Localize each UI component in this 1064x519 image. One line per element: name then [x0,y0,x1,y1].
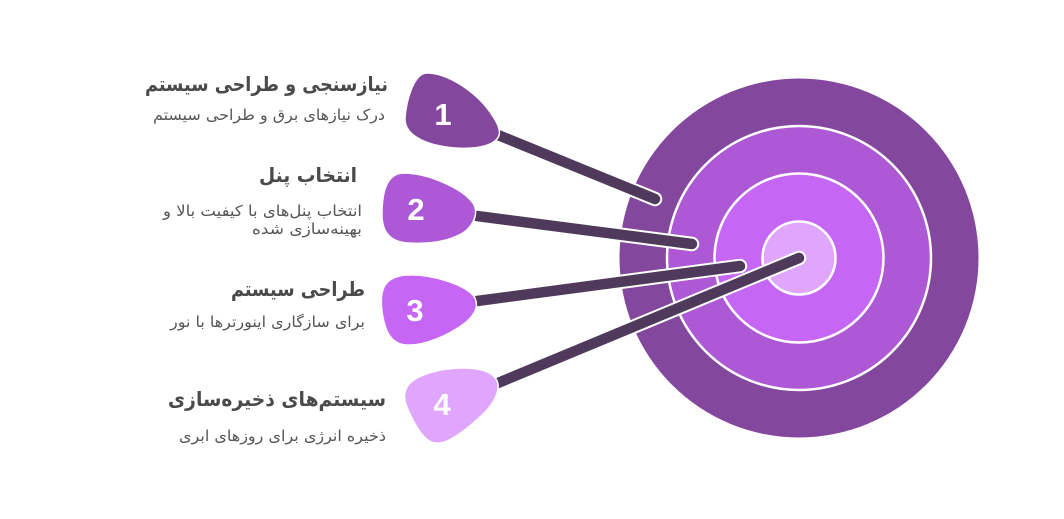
step 4 description: ذخیره انرژی برای روزهای ابری [179,427,386,445]
arrow 2 [477,216,692,244]
second ring [667,126,931,390]
step 3 description: برای سازگاری اینورترها با نور [169,313,365,331]
step 2 description [162,202,362,238]
step 1 description: درک نیازهای برق و طراحی سیستم [153,106,385,124]
number 1: 1 [434,97,452,132]
number 2: 2 [407,192,425,227]
arrow 4 [498,258,799,383]
third ring [714,174,884,342]
step 2 description: بهینه‌سازی شده [252,220,362,238]
step 2 heading: انتخاب پنل [259,163,357,188]
outer ring [620,78,978,438]
step 4 badge [405,368,498,443]
number 4: 4 [433,387,451,422]
step 3 heading: طراحی سیستم [231,277,365,301]
arrow 1 [498,135,655,199]
step 3 badge [381,275,476,345]
number 3: 3 [406,293,424,328]
step 4 heading: سیستم‌های ذخیره‌سازی [168,387,386,411]
target rings [620,78,978,438]
step 2 badge [382,173,476,243]
step 1 badge [405,73,499,148]
bullseye [762,222,836,294]
step 2 description: انتخاب پنل‌های با کیفیت بالا و [162,202,362,221]
arrow 3 [477,266,740,301]
step 1 heading: نیازسنجی و طراحی سیستم [145,72,388,96]
